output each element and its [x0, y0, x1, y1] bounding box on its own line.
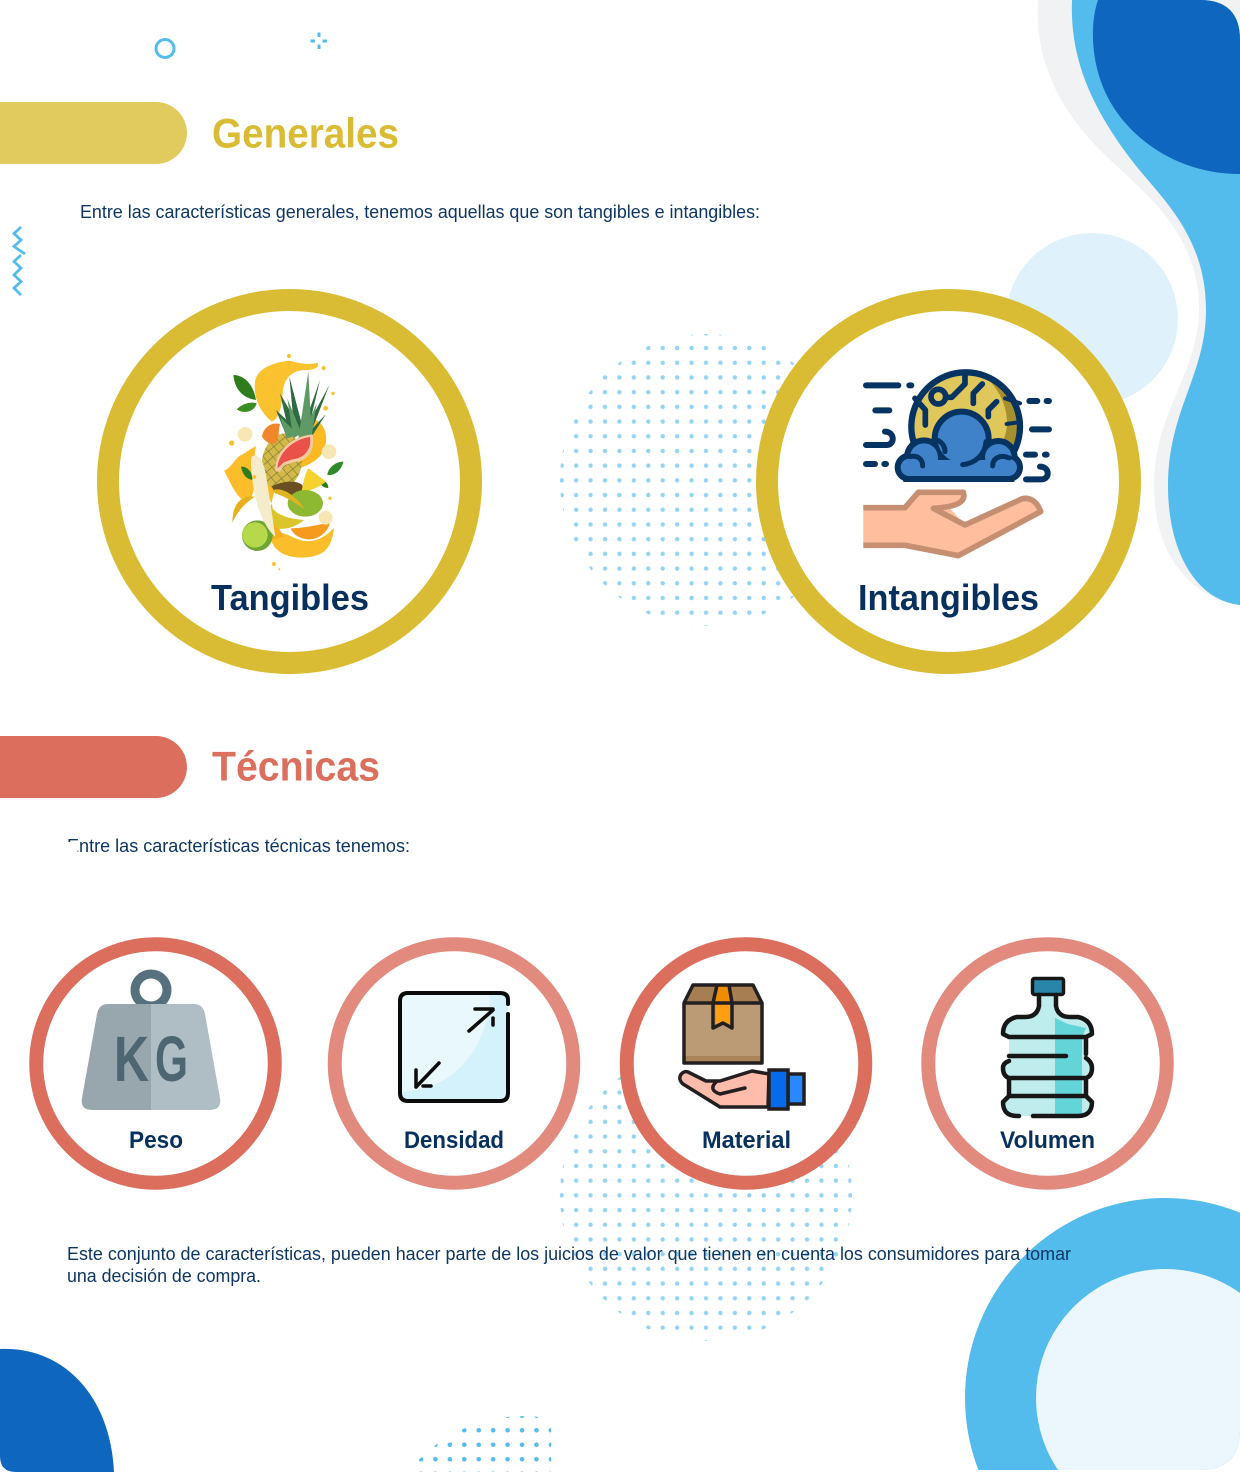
- dot pattern: generales: [560, 334, 852, 626]
- text: closing paragraph: Este conjunto de características, pueden hacer parte de los juicios de valor que tienen en cuenta los consumidores para tomar: [67, 1244, 1071, 1264]
- decoration: sparkle: [310, 32, 327, 49]
- decoration: zigzag: [14, 227, 25, 254]
- heading: generales: Generales: [212, 110, 399, 156]
- icon: box on hand: [680, 985, 804, 1109]
- text: técnicas intro: Entre las características técnicas tenemos:: [67, 836, 410, 856]
- panel: densidad: [335, 944, 573, 1183]
- background shape: bottom left: [0, 1349, 114, 1472]
- label: densidad: Densidad: [404, 1127, 504, 1154]
- label: intangibles: Intangibles: [858, 577, 1039, 618]
- section banner: técnicas: [0, 736, 187, 798]
- section banner: generales: [0, 102, 187, 164]
- label: volumen: Volumen: [1000, 1127, 1095, 1154]
- icon: weight: [82, 974, 220, 1110]
- icon: weight: G: [155, 1023, 188, 1095]
- background shape: bottom right circles: [965, 1198, 1240, 1470]
- text: generales intro: Entre las características generales, tenemos aquellas que son tangibles e intangibles:: [80, 202, 760, 222]
- dot pattern: bottom: [408, 1416, 551, 1472]
- text: closing paragraph: [67, 1244, 1071, 1286]
- icon: fruit splash: [224, 354, 343, 570]
- icon: expand square: [400, 993, 508, 1101]
- heading: técnicas: Técnicas: [212, 742, 380, 790]
- dot pattern: técnicas: [560, 1049, 852, 1341]
- icon: water bottle: [1003, 978, 1092, 1116]
- background blob: top right: [1038, 0, 1240, 605]
- background circle: light blue: [1006, 233, 1178, 405]
- cloud outline: [901, 415, 1017, 476]
- label: peso: Peso: [129, 1127, 183, 1154]
- panel: intangibles: [767, 300, 1130, 663]
- panel: material: [627, 944, 865, 1183]
- icon: weight: K: [114, 1023, 149, 1095]
- label: tangibles: Tangibles: [211, 577, 369, 618]
- panel: tangibles: [108, 300, 471, 663]
- text: closing paragraph: una decisión de compra.: [67, 1266, 261, 1286]
- panel: peso: [36, 944, 275, 1183]
- label: material: Material: [702, 1127, 791, 1154]
- decoration: ring: [156, 40, 174, 58]
- decoration: zigzag lower: [14, 255, 21, 295]
- panel: volumen: [928, 944, 1167, 1183]
- icon: digital globe on hand: [863, 372, 1049, 557]
